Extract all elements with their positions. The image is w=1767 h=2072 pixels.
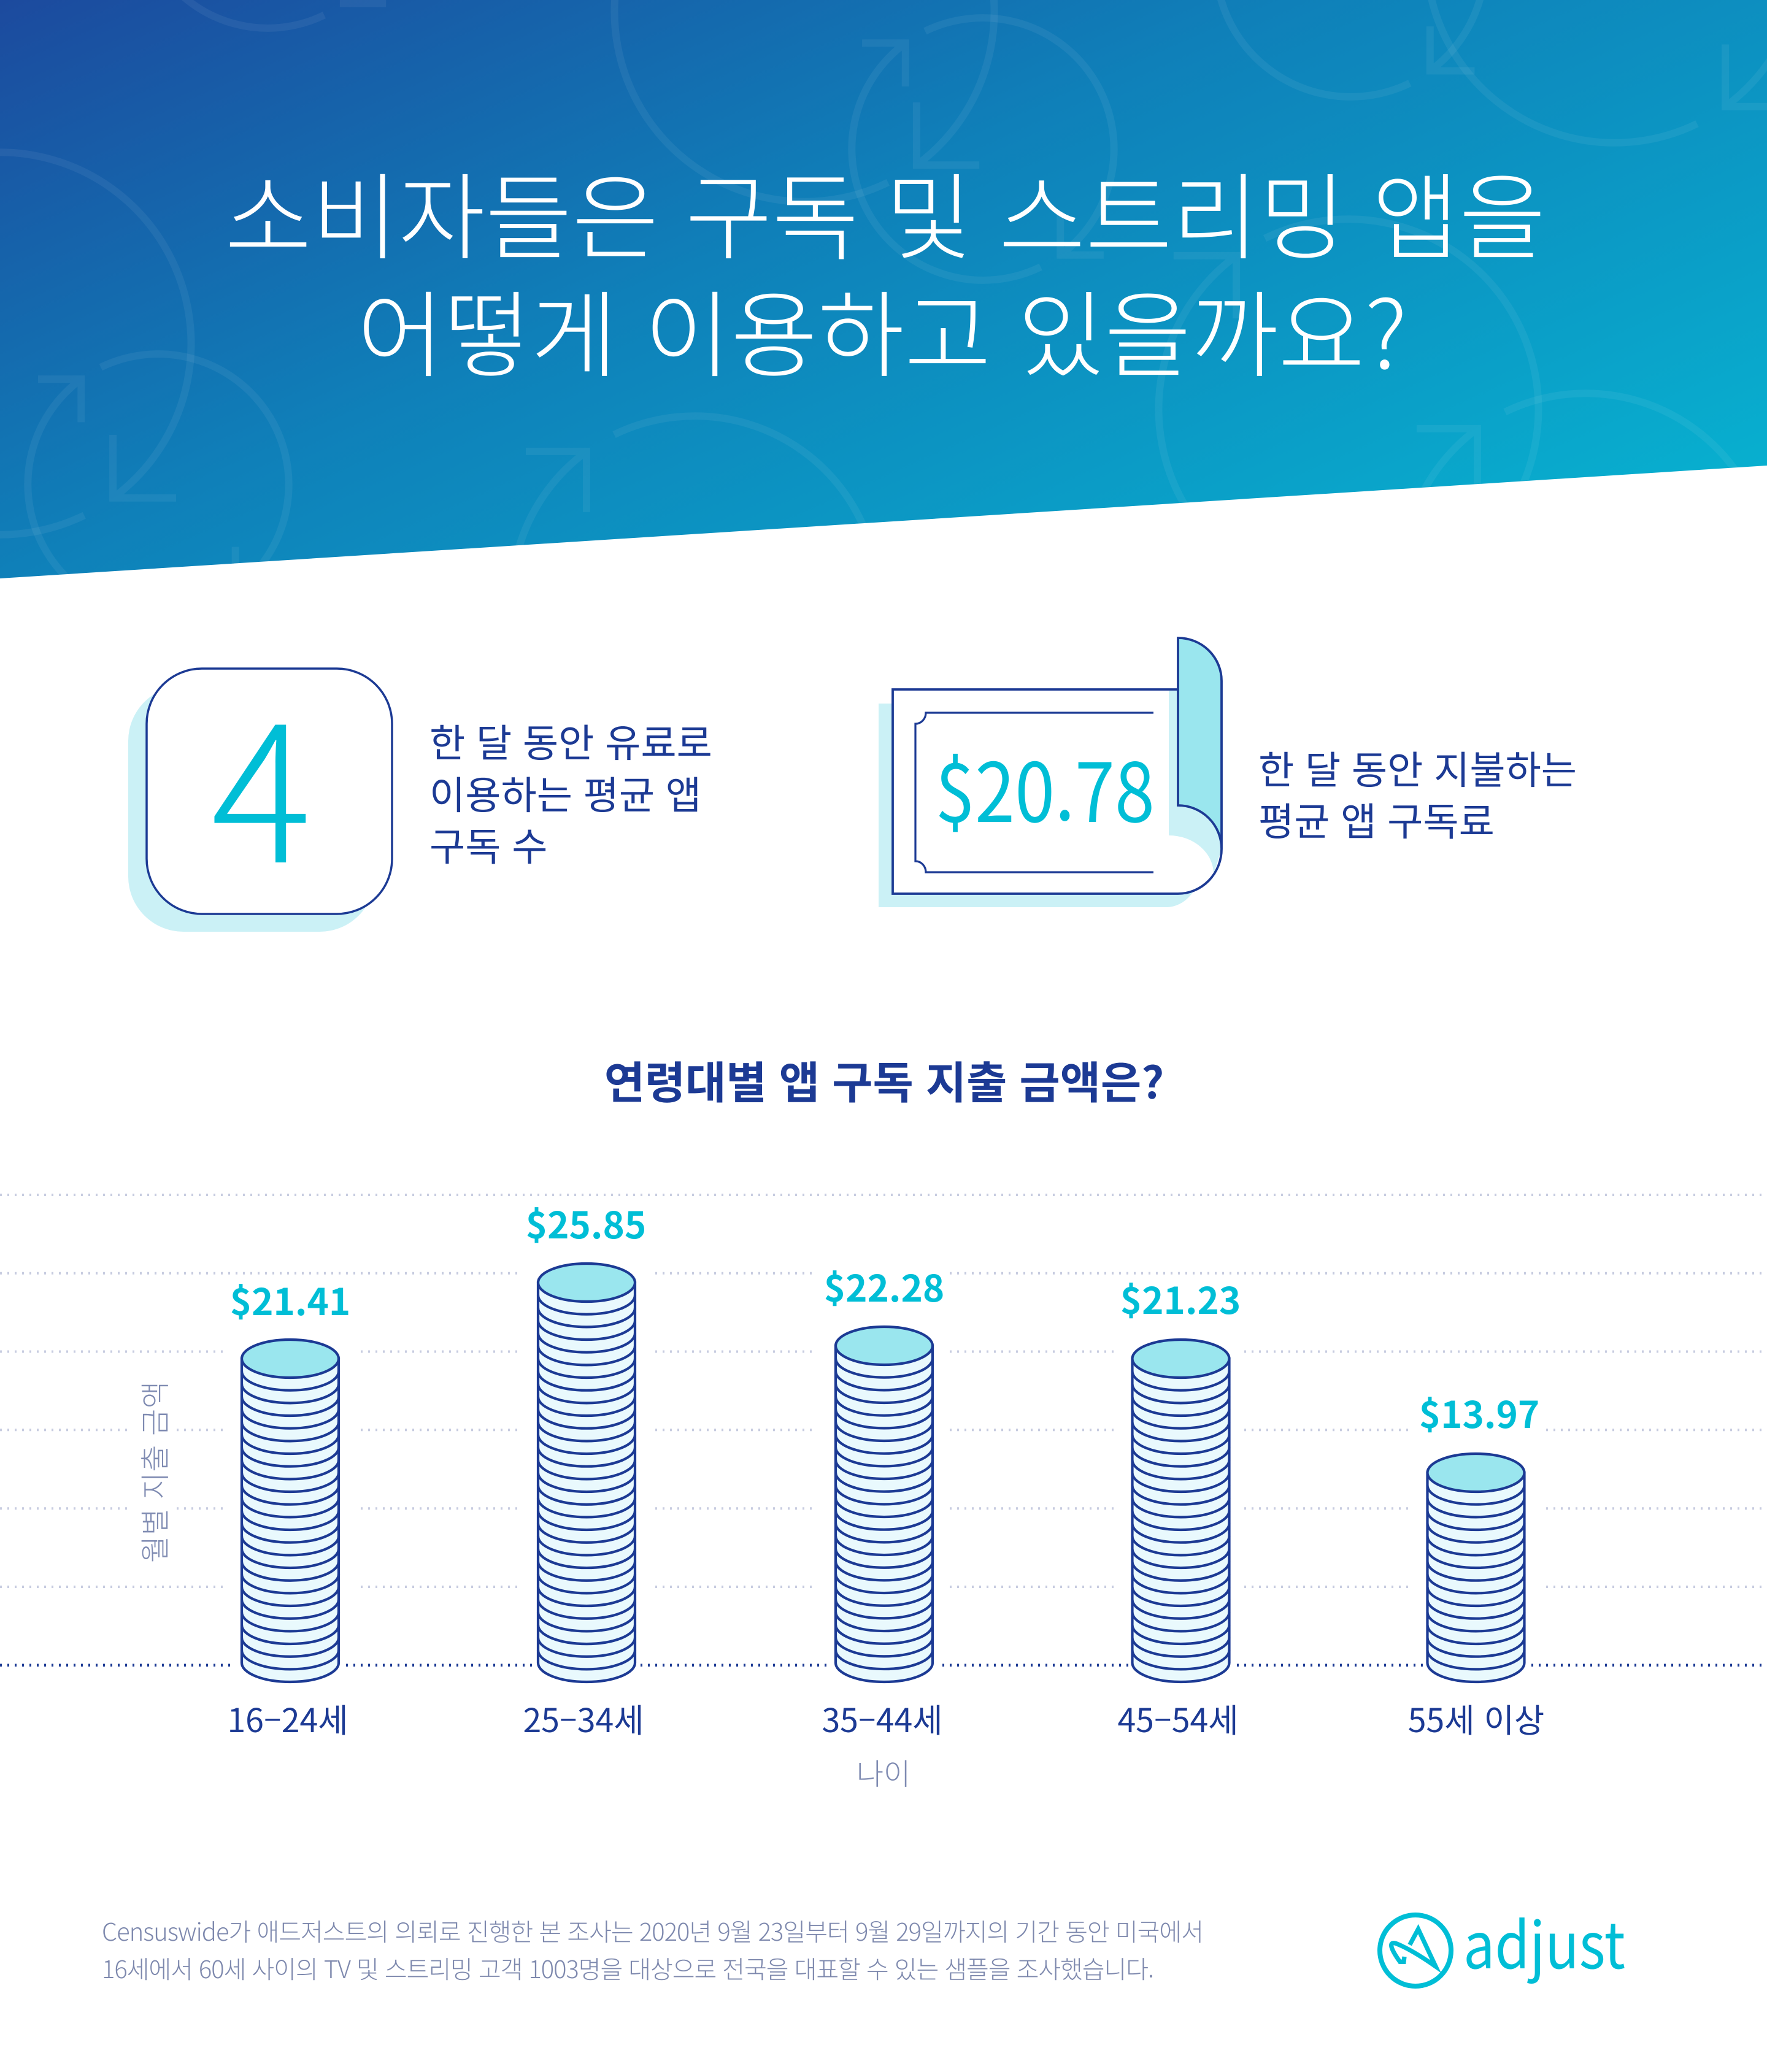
title <box>225 143 1546 397</box>
icon: adjust mark <box>1380 1915 1451 1986</box>
coin stack <box>1427 1454 1524 1682</box>
stat: average monthly payment <box>879 638 1577 907</box>
header banner <box>0 0 1767 578</box>
wordmark: adjust <box>1463 1894 1625 1987</box>
x axis title: 나이 <box>857 1750 910 1793</box>
x axis category labels <box>227 1695 1544 1742</box>
icon: dollar bill scroll <box>879 638 1222 907</box>
source note: 16세에서 60세 사이의 TV 및 스트리밍 고객 1003명을 대상으로 전국을 대표할 수 있는 샘플을 조사했습니다. <box>102 1950 1154 1986</box>
coin stack <box>242 1340 339 1682</box>
icon: app tile with number 4: 4 <box>211 643 312 917</box>
value label: $13.97 <box>1419 1386 1539 1439</box>
stat text: average number of apps: 한 달 동안 유료로 <box>429 713 712 769</box>
x axis category labels: 55세 이상 <box>1408 1695 1544 1742</box>
value label: $21.41 <box>230 1273 350 1326</box>
icon: app tile with number 4 <box>128 643 392 932</box>
stat text: average number of apps <box>429 713 712 872</box>
x axis category labels: 25–34세 <box>523 1695 644 1742</box>
value label: $25.85 <box>526 1196 646 1249</box>
source note <box>102 1913 1204 1986</box>
title: 어떻게 이용하고 있을까요? <box>357 261 1407 397</box>
source note: Censuswide가 애드저스트의 의뢰로 진행한 본 조사는 2020년 9월 23일부터 9월 29일까지의 기간 동안 미국에서 <box>102 1913 1204 1948</box>
stat text: average number of apps: 이용하는 평균 앱 <box>429 765 701 821</box>
stat text: average number of apps: 구독 수 <box>429 816 547 872</box>
title: 소비자들은 구독 및 스트리밍 앱을 <box>225 143 1546 279</box>
stat text: average subscription fee: 한 달 동안 지불하는 <box>1258 740 1577 796</box>
x axis category labels: 45–54세 <box>1117 1695 1239 1742</box>
coin stack <box>836 1327 933 1682</box>
y axis label: 월별 지출 금액 <box>131 1381 174 1563</box>
bar: 16–24 <box>230 1273 350 1682</box>
value label: $21.23 <box>1120 1272 1241 1325</box>
x axis category labels: 35–44세 <box>822 1695 943 1742</box>
x axis category labels: 16–24세 <box>227 1695 348 1742</box>
coin stack <box>1133 1340 1230 1682</box>
bar chart: monthly spend by age <box>0 1195 1767 1793</box>
coin stack <box>538 1264 635 1682</box>
bar: 25–34 <box>526 1196 646 1682</box>
stat text: average subscription fee: 평균 앱 구독료 <box>1258 791 1495 847</box>
bar: 55+ <box>1419 1386 1539 1682</box>
bar: 35–44 <box>824 1259 944 1682</box>
logo: adjust <box>1380 1894 1625 1987</box>
chart heading: 연령대별 앱 구독 지출 금액은? <box>604 1047 1164 1111</box>
stat text: average subscription fee <box>1258 740 1577 847</box>
bar: 45–54 <box>1120 1272 1241 1682</box>
stat: average number of subscriptions <box>128 643 712 932</box>
value label: $22.28 <box>824 1259 944 1313</box>
icon: dollar bill scroll: $20.78 <box>935 728 1155 846</box>
